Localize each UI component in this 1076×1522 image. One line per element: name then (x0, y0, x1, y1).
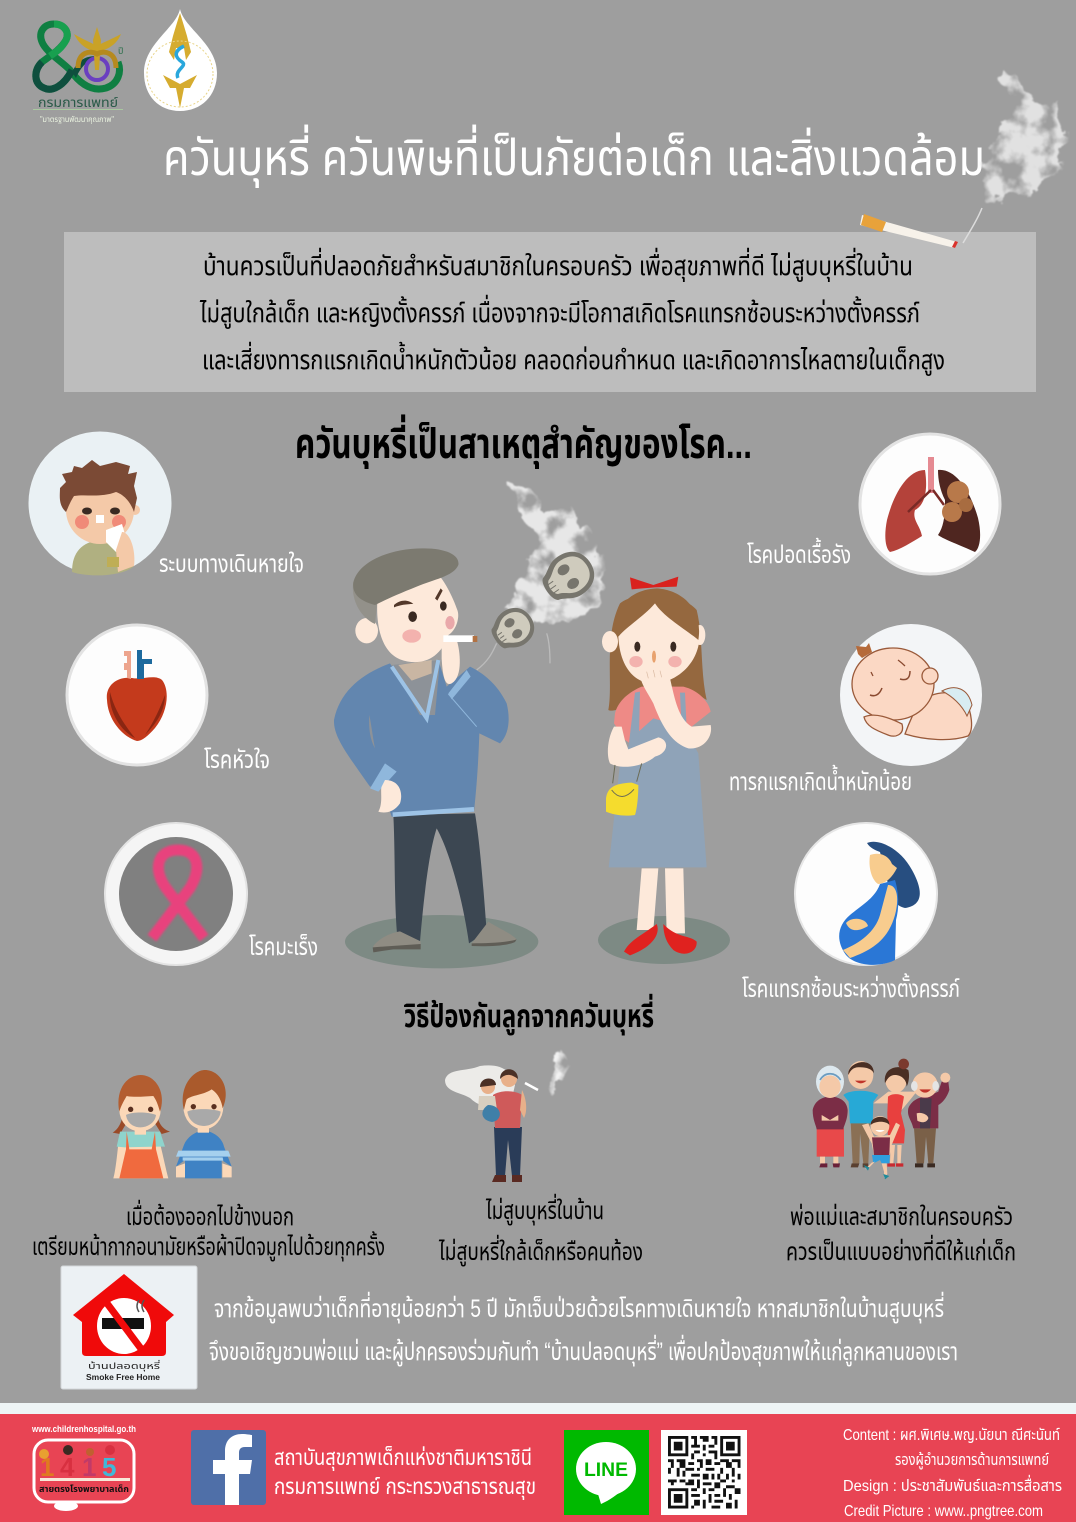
footer: institute name (274, 1445, 536, 1500)
text: role model (786, 1203, 1016, 1266)
icon: smoke free home sign: บ้านปลอดบุหรี่ (88, 1359, 161, 1371)
label: cancer: โรคมะเร็ง (249, 933, 318, 961)
logo: 80 years department of medical services: ปี (117, 46, 123, 56)
heading: diseases: ควันบุหรี่เป็นสาเหตุสำคัญของโรค... (295, 414, 752, 469)
footer: hotline 1415 logo: 4 (60, 1452, 75, 1482)
heading: prevention: วิธีป้องกันลูกจากควันบุหรี่ (403, 993, 654, 1035)
text: wear a mask: เมื่อต้องออกไปข้างนอก (126, 1199, 294, 1231)
footer: hotline 1415 logo: 1 (40, 1452, 54, 1482)
icon: pregnant woman circle (795, 823, 937, 965)
father (843, 1061, 878, 1167)
text: closing message (209, 1291, 958, 1367)
icon: family (813, 1059, 950, 1179)
icon: baby circle (840, 624, 982, 766)
icon: children wearing masks (113, 1070, 232, 1178)
skulls (477, 543, 602, 670)
footer: hotline 1415 logo (31, 1424, 136, 1511)
icon: LINE (564, 1430, 649, 1515)
grandfather (908, 1072, 950, 1167)
logo: 80 years department of medical services: กรมการแพทย์ (38, 95, 118, 110)
child (862, 1116, 900, 1179)
man (334, 548, 538, 968)
smoke cloud (506, 477, 604, 624)
text: role model: พ่อแม่และสมาชิกในครอบครัว (790, 1203, 1013, 1231)
logo: 80 years department of medical services (33, 24, 123, 124)
icon: lungs circle (860, 434, 1000, 574)
text: role model: ควรเป็นแบบอย่างที่ดีให้แก่เด็ก (786, 1234, 1016, 1266)
grandmother (813, 1066, 848, 1167)
icon: man smoking holding child (445, 1052, 567, 1182)
icon: QR code (661, 1430, 747, 1515)
footer: hotline 1415 logo: สายตรงโรงพยาบาลเด็ก (39, 1484, 129, 1494)
intro text line 1: บ้านควรเป็นที่ปลอดภัยสำหรับสมาชิกในครอบครัว เพื่อสุขภาพที่ดี ไม่สูบบุหรี่ในบ้าน (203, 247, 913, 282)
icon: smoke free home sign: Smoke Free Home (86, 1373, 161, 1382)
icon: smoke free home sign (61, 1266, 197, 1389)
footer: hotline 1415 logo: www.childrenhospital.go.th (31, 1424, 136, 1434)
footer: credits: Design : ประชาสัมพันธ์และการสื่อสาร (843, 1474, 1062, 1495)
text: wear a mask: เตรียมหน้ากากอนามัยหรือผ้าปิดจมูกไปด้วยทุกครั้ง (32, 1230, 385, 1262)
logo: teardrop institute emblem (144, 9, 217, 111)
girl (598, 577, 730, 964)
footer: credits (843, 1427, 1062, 1520)
footer: hotline 1415 logo: 1 (82, 1452, 96, 1482)
logo: 80 years department of medical services: "มาตรฐานพัฒนาคุณภาพ" (40, 115, 114, 124)
icon: facebook (191, 1430, 266, 1505)
icon: heart circle (67, 625, 207, 765)
footer: institute name: กรมการแพทย์ กระทรวงสาธารณสุข (274, 1474, 536, 1500)
text: no smoking at home: ไม่สูบบุหรี่ในบ้าน (485, 1193, 604, 1226)
panel: intro (64, 232, 1036, 392)
mother (873, 1059, 917, 1167)
intro text line 2: ไม่สูบใกล้เด็ก และหญิงตั้งครรภ์ เนื่องจากจะมีโอกาสเกิดโรคแทรกซ้อนระหว่างตั้งครรภ์ (199, 294, 920, 329)
icon: LINE: LINE (584, 1460, 628, 1481)
footer: hotline 1415 logo: 5 (102, 1452, 116, 1482)
text: no smoking at home (438, 1193, 643, 1267)
footer band (0, 1403, 1076, 1522)
label: low birth weight: ทารกแรกเกิดน้ำหนักน้อย (729, 764, 912, 796)
text: wear a mask (32, 1199, 385, 1262)
illustration: man smoking and girl (334, 543, 730, 968)
label: chronic lung disease: โรคปอดเรื้อรัง (747, 537, 851, 569)
footer: institute name: สถาบันสุขภาพเด็กแห่งชาติมหาราชินี (274, 1445, 532, 1471)
icon: ribbon circle (105, 823, 247, 965)
text: no smoking at home: ไม่สูบหรี่ใกล้เด็กหรือคนท้อง (438, 1234, 643, 1267)
label: heart disease: โรคหัวใจ (204, 746, 270, 774)
label: respiratory: ระบบทางเดินหายใจ (159, 550, 304, 578)
icon: sick boy circle (28, 432, 172, 575)
label: pregnancy complications: โรคแทรกซ้อนระหว่างตั้งครรภ์ (742, 972, 960, 1003)
icon: cigarette with smoke (860, 68, 1066, 248)
